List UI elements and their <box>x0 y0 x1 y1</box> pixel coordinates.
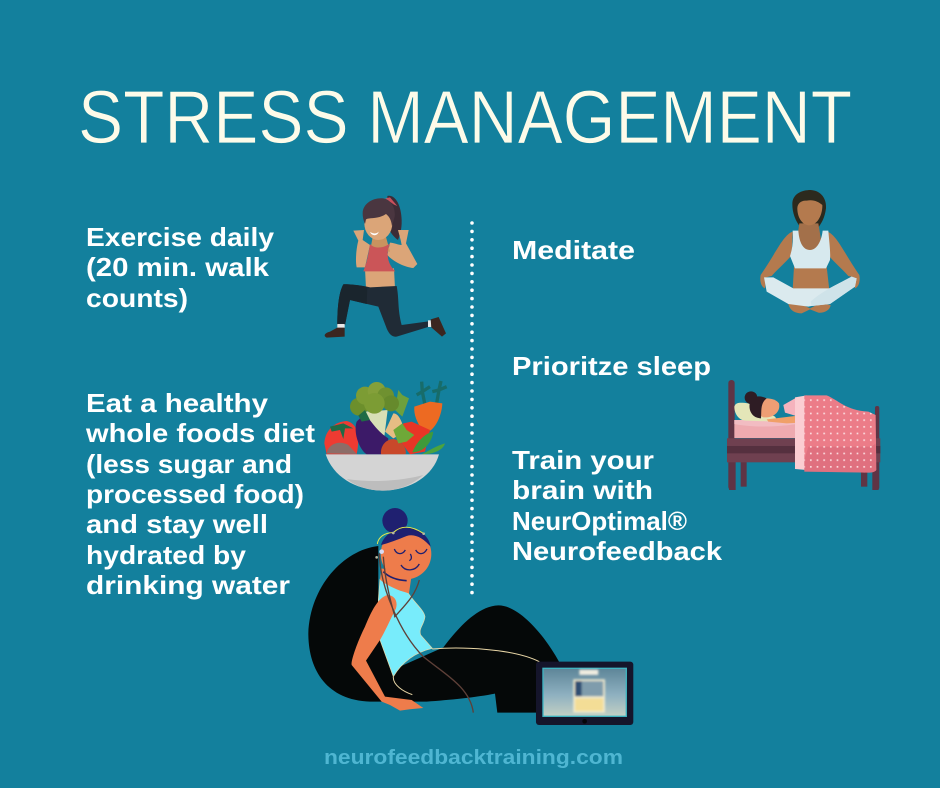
text: diet <box>85 388 315 600</box>
text: neurofeedback <box>512 445 723 566</box>
text: exercise: counts) <box>86 283 188 313</box>
text: meditate: Meditate <box>512 235 635 265</box>
icon: sleeping woman in bed <box>727 380 880 490</box>
illustration: woman with neurofeedback sensors and tablet <box>308 508 633 725</box>
icon: exercising woman <box>325 196 446 338</box>
text: diet: whole foods diet <box>85 418 315 448</box>
text: exercise: (20 min. walk <box>86 252 270 282</box>
text: diet: drinking water <box>86 570 290 600</box>
icon: vegetable bowl <box>324 381 447 491</box>
text: diet: processed food) <box>86 479 304 509</box>
text: sleep: Prioritze sleep <box>512 351 711 381</box>
text: neurofeedback: NeurOptimal® <box>512 506 687 536</box>
text: diet: hydrated by <box>86 540 247 570</box>
footer url: neurofeedbacktraining.com <box>324 747 623 769</box>
text: exercise: Exercise daily <box>86 222 275 252</box>
text: diet: and stay well <box>86 509 268 539</box>
text: diet: (less sugar and <box>86 449 292 479</box>
title: STRESS MANAGEMENT <box>78 75 852 159</box>
text: diet: Eat a healthy <box>86 388 269 418</box>
text: neurofeedback: Neurofeedback <box>512 536 723 566</box>
text: neurofeedback: Train your <box>512 445 654 475</box>
text: exercise <box>86 222 275 313</box>
text: neurofeedback: brain with <box>512 475 653 505</box>
icon: meditating woman <box>760 190 860 313</box>
